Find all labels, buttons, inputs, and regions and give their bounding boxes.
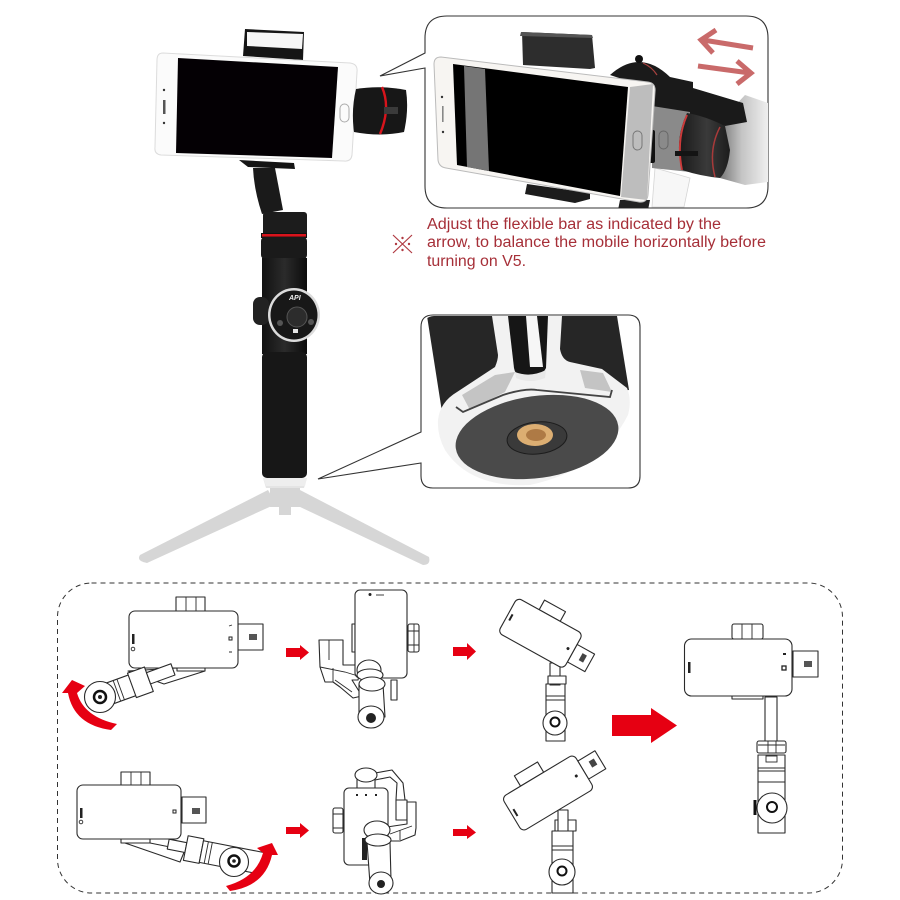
curved arrow <box>62 680 117 730</box>
large arrow <box>612 708 677 743</box>
motor head and handle <box>261 212 307 486</box>
textured grip <box>427 316 629 412</box>
step: row 1 rotated result <box>498 588 606 741</box>
callout: tripod mount close-up <box>318 315 640 489</box>
strap slot <box>508 316 548 376</box>
control panel <box>253 288 320 342</box>
arm <box>239 160 295 214</box>
note text: Adjust the flexible bar as indicated by the <box>427 216 721 233</box>
rubber pad <box>456 394 618 480</box>
step: row 1 tilted left <box>62 597 263 730</box>
chrome base <box>438 316 630 485</box>
light clamp <box>243 29 304 60</box>
callout: flexible bar adjustment <box>380 16 768 210</box>
chrome reflections <box>462 370 612 410</box>
light unit <box>520 32 595 69</box>
mounting clamps <box>525 184 650 210</box>
arrow <box>453 825 476 839</box>
note text: turning on V5. <box>427 253 526 270</box>
main gimbal photo <box>139 29 429 565</box>
step: row 2 rear view <box>333 768 416 894</box>
instructions panel <box>58 583 842 894</box>
brass thread <box>506 421 568 455</box>
note symbol <box>393 235 412 253</box>
roll motor <box>643 106 730 178</box>
roll motor <box>353 87 407 134</box>
phone <box>434 57 655 202</box>
adjustment arrows <box>698 30 753 84</box>
ghost position <box>652 95 768 207</box>
arrow <box>286 823 309 838</box>
rear motor arm <box>610 55 747 126</box>
mobile phone <box>155 53 357 161</box>
note text: arrow, to balance the mobile horizontally before <box>427 234 766 251</box>
step: balanced result <box>684 624 818 833</box>
control panel: API <box>288 295 302 302</box>
tripod <box>139 478 429 565</box>
step: row 2 tilted right <box>77 772 278 891</box>
curved arrow <box>226 843 278 891</box>
step: row 2 rotated result <box>496 734 611 893</box>
arrow <box>286 645 309 660</box>
arrow <box>453 643 476 660</box>
step: row 1 side view <box>319 590 419 728</box>
note text <box>427 216 766 270</box>
